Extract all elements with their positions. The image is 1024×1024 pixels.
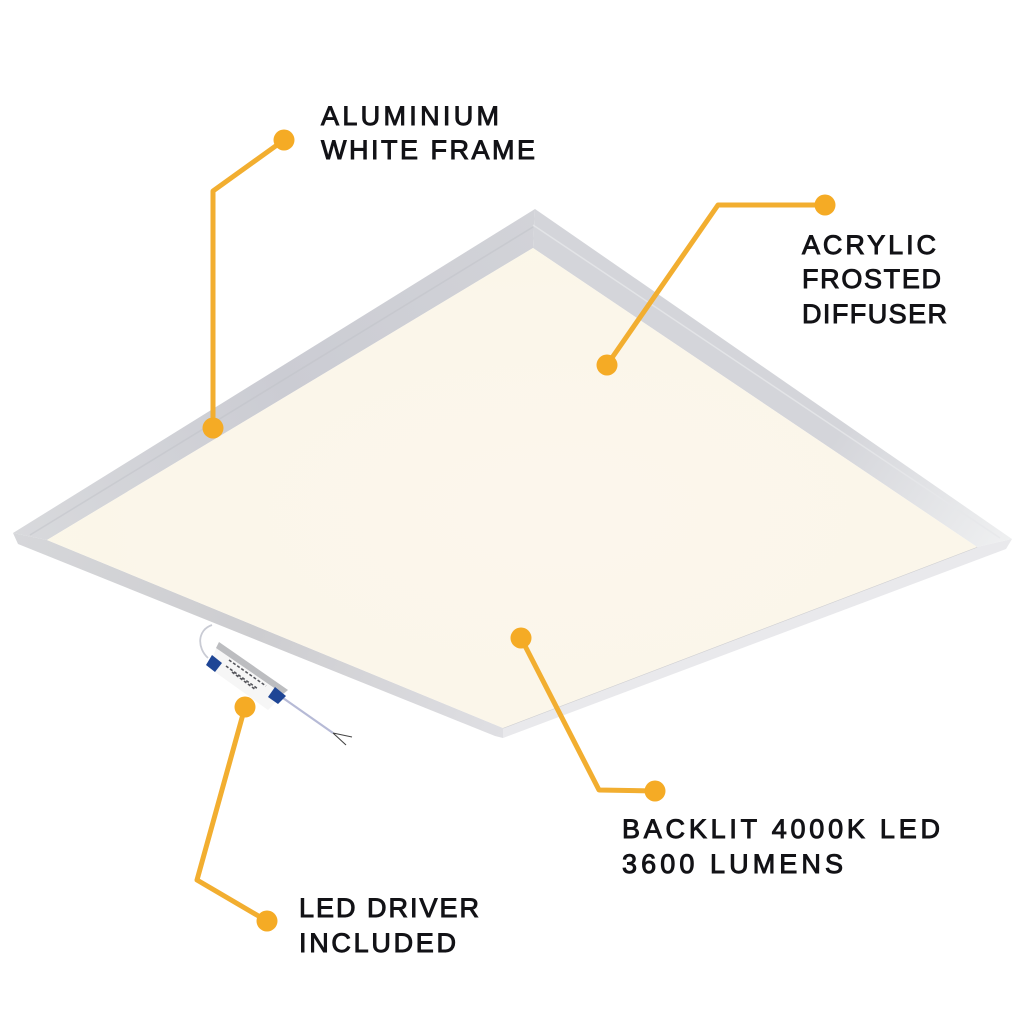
aluminium frame	[13, 209, 1012, 738]
callout: LED driver included: LED DRIVER	[299, 893, 479, 923]
callout: acrylic frosted diffuser: FROSTED	[802, 264, 941, 294]
callout: aluminium white frame: WHITE FRAME	[321, 135, 535, 165]
callout: backlit LED: 3600 LUMENS	[622, 849, 843, 879]
callout: backlit LED: BACKLIT 4000K LED	[622, 814, 940, 844]
callout: aluminium white frame	[202, 101, 535, 438]
panel: LED ceiling panel	[13, 209, 1012, 738]
icon: LED driver	[200, 625, 352, 745]
callout: LED driver included	[197, 696, 479, 958]
callout: LED driver included: INCLUDED	[299, 928, 456, 958]
frosted diffuser	[47, 248, 977, 728]
callout: aluminium white frame: ALUMINIUM	[321, 101, 499, 131]
callout: acrylic frosted diffuser	[596, 194, 947, 376]
callout: backlit LED	[510, 628, 940, 879]
callout: acrylic frosted diffuser: ACRYLIC	[802, 230, 936, 260]
callout: acrylic frosted diffuser: DIFFUSER	[802, 299, 947, 329]
